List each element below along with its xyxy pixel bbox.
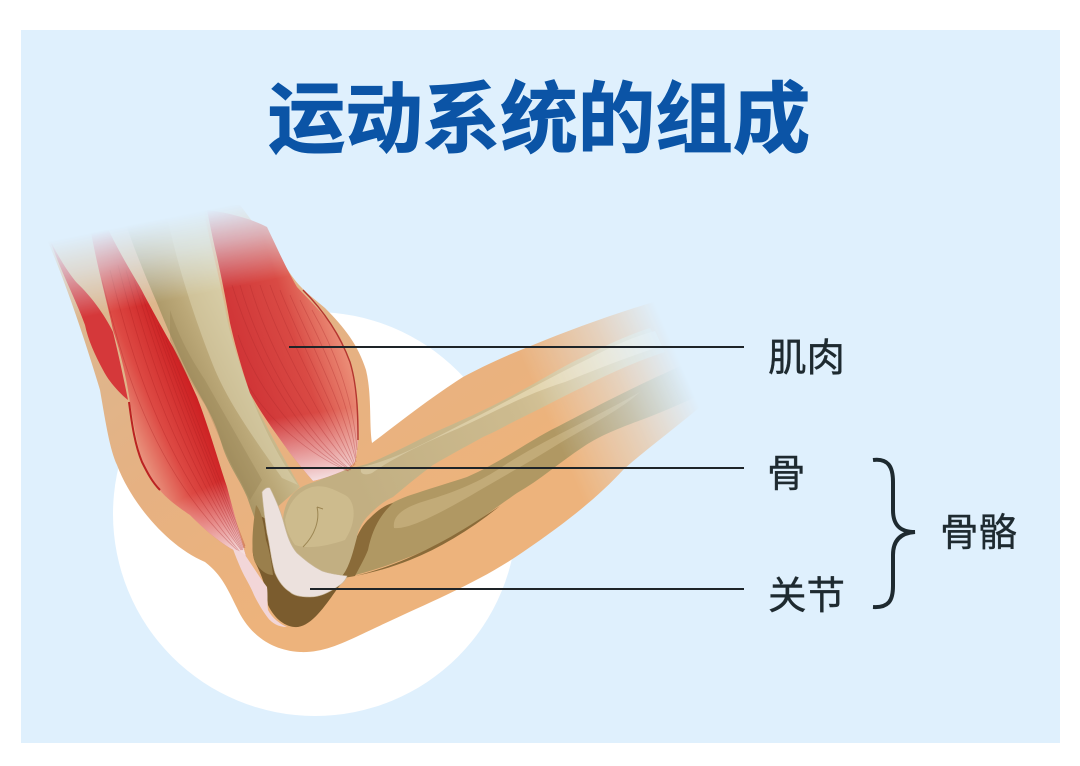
label: joint: 关节 — [768, 575, 845, 618]
label: bone: 骨 — [767, 453, 806, 496]
lower forearm bone highlight — [394, 392, 640, 528]
upper forearm bone with elbow head — [283, 328, 665, 575]
brace — [873, 460, 915, 607]
leader line: bone — [266, 467, 744, 469]
elbow head highlight — [285, 486, 354, 547]
leader line: muscle — [289, 346, 744, 348]
lower forearm bone dark edge — [343, 503, 500, 578]
label: muscle: 肌肉 — [768, 337, 845, 380]
upper arm bone — [132, 239, 300, 518]
upper forearm bone pale band — [361, 344, 625, 474]
tendon — [233, 549, 287, 627]
light streak on upper arm bone — [176, 252, 298, 484]
socket mid-tone — [252, 505, 273, 575]
leader line: joint — [310, 588, 744, 590]
joint cartilage — [262, 488, 347, 597]
muscle fibres — [102, 265, 245, 552]
joint socket: dark bone end — [252, 516, 345, 628]
title: 运动系统的组成 — [268, 77, 810, 163]
dark muscle edge — [129, 402, 160, 490]
muscle fibres — [232, 285, 357, 471]
white circle behind elbow — [113, 312, 517, 716]
large left muscle — [88, 215, 246, 556]
small left muscle — [50, 240, 128, 400]
lower forearm bone — [344, 373, 680, 578]
arm skin silhouette — [45, 200, 720, 652]
illustration: elbow anatomy — [45, 200, 720, 652]
dark muscle edge — [303, 290, 358, 440]
shadow on upper arm bone — [170, 310, 262, 500]
small fracture mark — [303, 507, 323, 547]
label: skeleton: 骨骼 — [940, 512, 1017, 555]
upper right muscle — [207, 210, 359, 481]
